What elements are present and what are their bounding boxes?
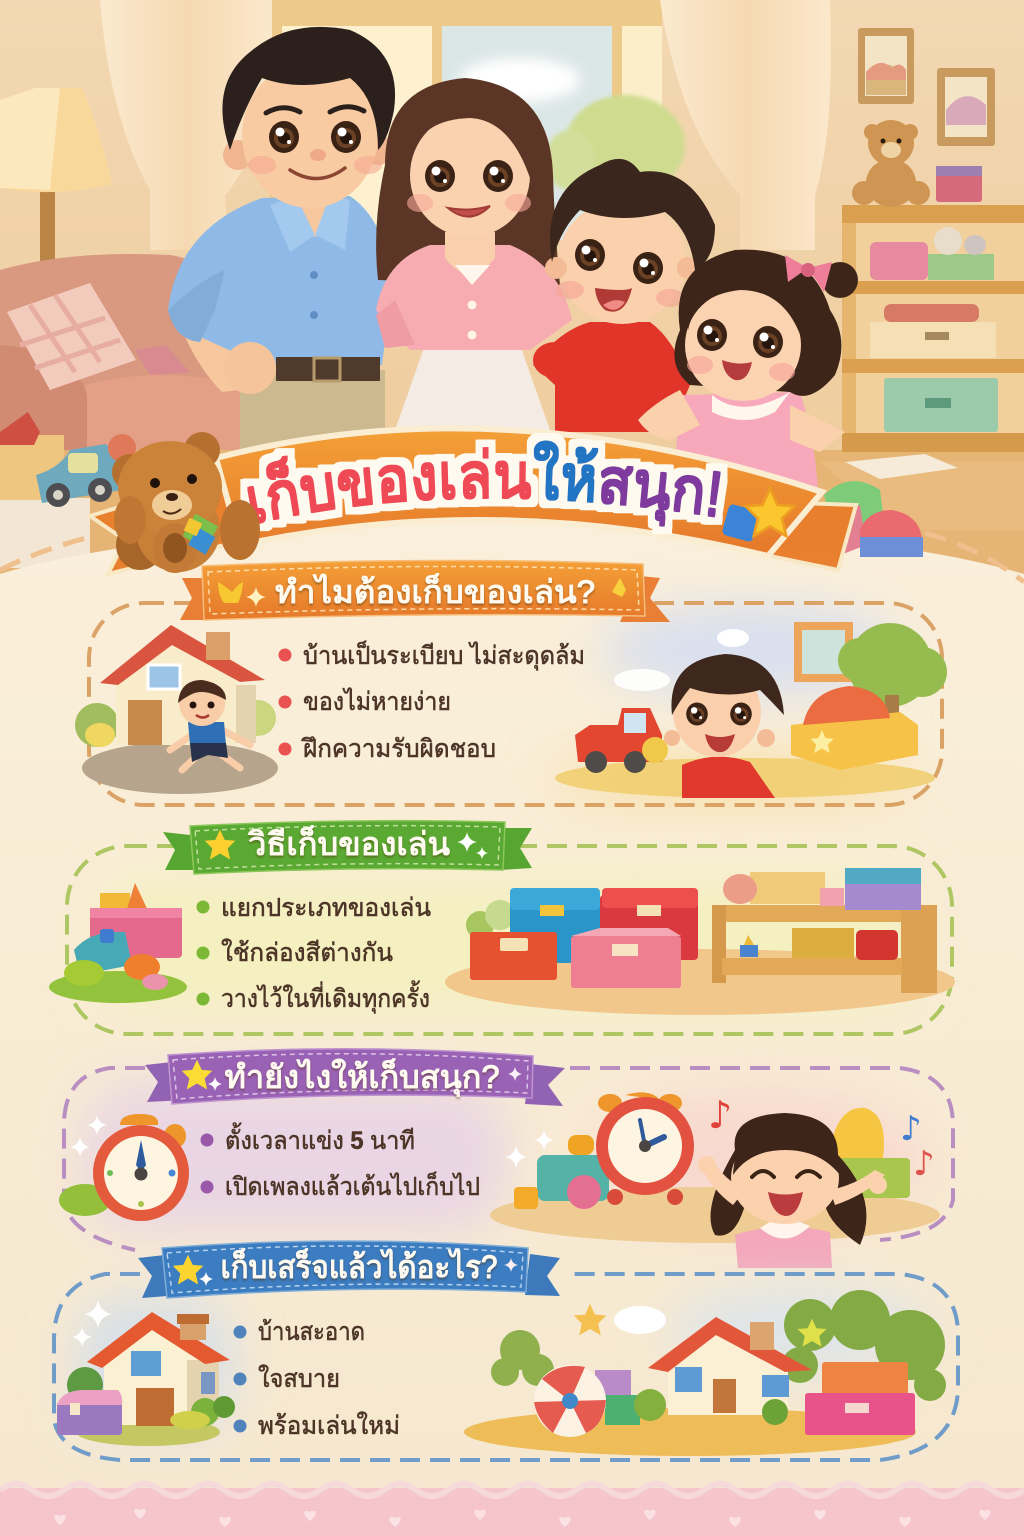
illustration: storage boxes and shelf [445, 868, 955, 1015]
room background [0, 0, 1024, 600]
floor paper [845, 454, 958, 479]
right curtain [660, 0, 831, 250]
list: ตั้งเวลาแข่ง 5 นาที [225, 1122, 415, 1155]
banner title: เก็บของเล่นให้สนุก! [240, 433, 728, 534]
header ribbon [138, 1241, 560, 1298]
main title banner [86, 426, 859, 577]
shelf [842, 205, 1024, 453]
icon: alarm clock [59, 1114, 189, 1221]
list: แยกประเภทของเล่น [221, 894, 431, 922]
picture frames [858, 28, 995, 146]
header ribbon [163, 821, 532, 874]
header icons [182, 1060, 522, 1091]
illustration: girl cheering with clock and toys [490, 1092, 940, 1268]
illustration: tidy yard with ball and house [464, 1290, 946, 1456]
header text: ทำยังไงให้เก็บสนุก? [224, 1058, 500, 1097]
illustration: house and running boy [75, 625, 278, 794]
banner right tail [716, 500, 856, 570]
panel: how to pick up toys [49, 821, 955, 1034]
panel: why pick up toys [75, 560, 947, 805]
list: ฝึกความรับผิดชอบ [301, 735, 496, 763]
shelf teddy [852, 120, 930, 207]
illustration: clean house [57, 1300, 235, 1446]
icon: banner teddy bear [112, 432, 260, 573]
toy blocks by banner [824, 481, 923, 557]
banner left tail [90, 476, 245, 574]
dashed border [89, 603, 942, 805]
icon: star and block [721, 489, 794, 543]
shelf pink box [936, 166, 982, 202]
list: ใช้กล่องสีต่างกัน [221, 938, 393, 967]
panel: what you get [54, 1241, 958, 1460]
girl [638, 250, 858, 490]
family [168, 27, 858, 490]
list: เปิดเพลงแล้วเต้นไปเก็บไป [225, 1171, 480, 1201]
list [200, 1122, 480, 1201]
floor and rug [0, 450, 1024, 580]
header text: เก็บเสร็จแล้วได้อะไร? [220, 1248, 498, 1285]
header icons [218, 578, 626, 607]
list: ของไม่หายง่าย [303, 687, 451, 716]
dashed border [67, 846, 952, 1034]
left curtain [100, 0, 272, 250]
illustration: boy with toy truck and chest [555, 622, 947, 798]
list [278, 640, 585, 763]
sofa [0, 254, 240, 450]
header ribbon [145, 1049, 565, 1106]
dashed border [64, 1068, 953, 1250]
illustration: girl cheering with clock and toys: ♪ [913, 1144, 935, 1184]
bottom lace border [0, 1484, 1024, 1536]
parchment background [0, 522, 1024, 1536]
list [234, 1318, 400, 1440]
toy crate [0, 412, 64, 500]
illustration: girl cheering with clock and toys: ♪ [708, 1093, 732, 1137]
header text: วิธีเก็บของเล่น [248, 825, 450, 862]
mom [376, 78, 572, 430]
header icons [205, 830, 488, 859]
header text: ทำไมต้องเก็บของเล่น? [275, 573, 595, 610]
list: วางไว้ในที่เดิมทุกครั้ง [221, 980, 430, 1014]
illustration: pink toy box on rug [49, 883, 187, 1003]
list: พร้อมเล่นใหม่ [258, 1411, 400, 1440]
boy [533, 159, 715, 432]
panel tint [100, 880, 920, 1010]
list: บ้านเป็นระเบียบ ไม่สะดุดล้ม [303, 640, 585, 671]
header icons [173, 1255, 518, 1286]
header ribbon [180, 560, 670, 622]
illustration: girl cheering with clock and toys: ♪ [900, 1109, 922, 1149]
dashed border [54, 1274, 958, 1460]
panel tint [550, 605, 910, 800]
panel: how to make it fun [59, 1049, 953, 1268]
parchment dashed edge [0, 533, 1024, 582]
window [270, 0, 685, 240]
list: ใจสบาย [258, 1364, 340, 1393]
banner body [216, 428, 822, 556]
panel tint [80, 1290, 930, 1430]
dad [168, 27, 395, 455]
toy car [36, 434, 136, 507]
lamp [0, 88, 112, 270]
list [196, 894, 431, 1014]
panel tint [85, 1085, 930, 1230]
list: บ้านสะอาด [258, 1318, 365, 1346]
